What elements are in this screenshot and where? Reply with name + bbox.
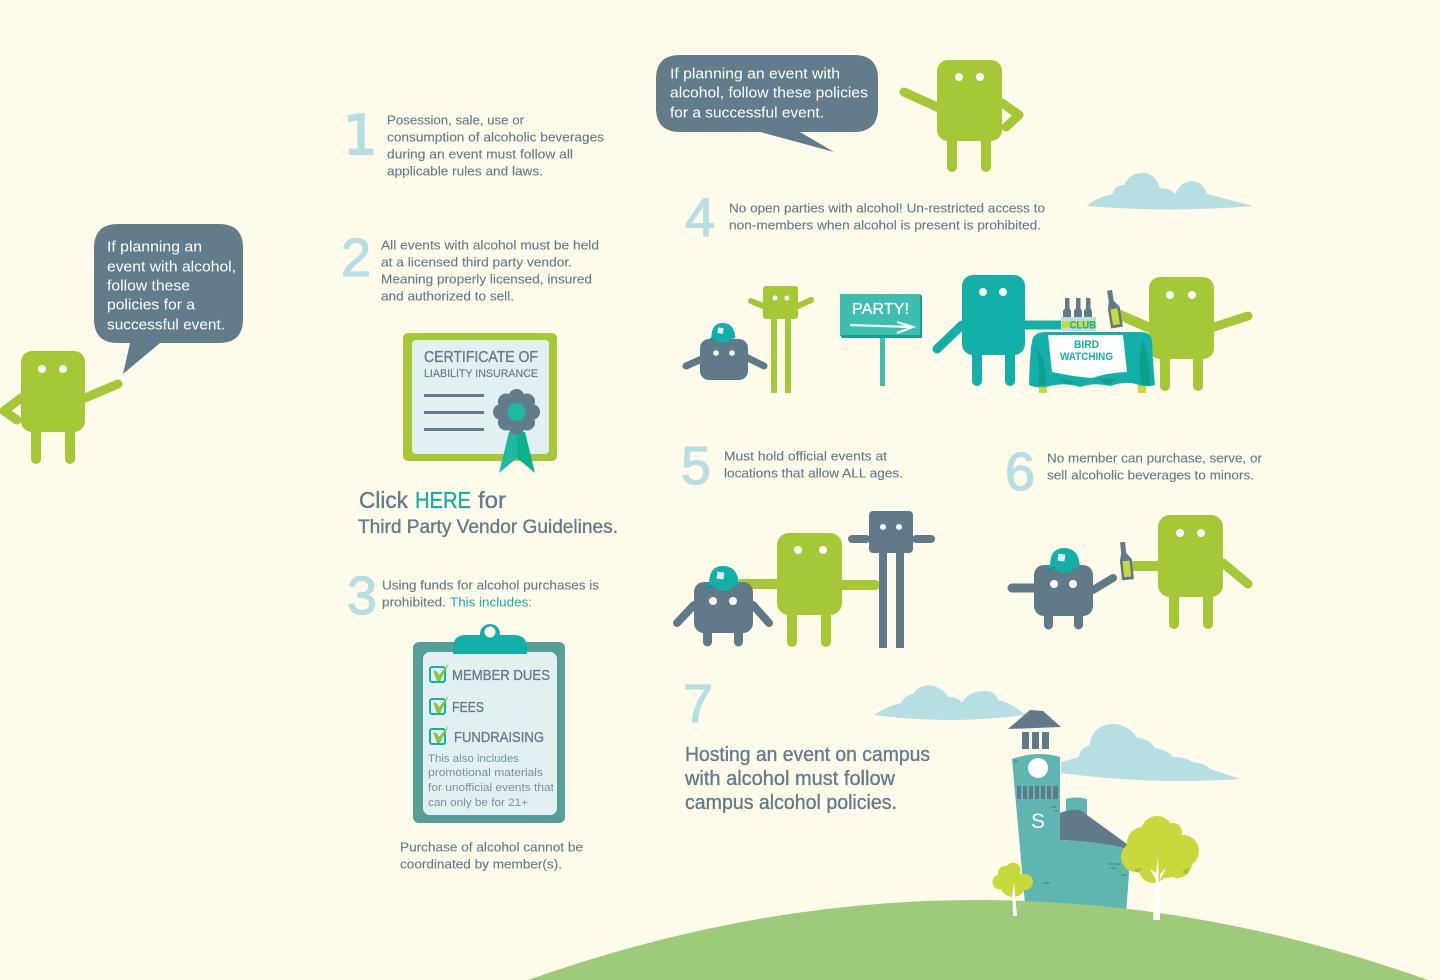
cloud behind tower xyxy=(1061,724,1240,781)
checklist items: FEES xyxy=(452,700,484,716)
tall green robot xyxy=(751,286,811,393)
speech bubble left xyxy=(94,224,243,374)
step 4 xyxy=(685,188,1045,248)
tall slate robot xyxy=(852,511,931,648)
ribbon xyxy=(499,432,535,473)
icon: liability insurance certificate xyxy=(403,333,557,473)
green robot behind table xyxy=(1105,277,1248,386)
step 1: during an event must follow all xyxy=(387,147,573,162)
step 2: at a licensed third party vendor. xyxy=(381,255,572,270)
left mascot with speech bubble xyxy=(4,224,243,459)
step 2 xyxy=(341,228,599,304)
step 7: 7 xyxy=(683,674,713,734)
step 7: with alcohol must follow xyxy=(684,768,896,790)
speech bubble top: If planning an event with xyxy=(670,66,840,83)
teal robot xyxy=(937,275,1062,381)
icon: liability insurance certificate: CERTIFICATE OF xyxy=(424,349,538,366)
small tree xyxy=(992,862,1033,916)
link heading: third party vendor guidelines: Third Party Vendor Guidelines. xyxy=(358,517,618,538)
step 4: 4 xyxy=(685,188,715,248)
step 4: No open parties with alcohol! Un-restricted access to xyxy=(729,201,1045,216)
step 3: 3 xyxy=(347,566,377,626)
green robot left xyxy=(4,351,118,459)
icon: clipboard checklist xyxy=(413,624,565,823)
speech bubble top: alcohol, follow these policies xyxy=(670,85,868,102)
step 1: Posession, sale, use or xyxy=(387,113,525,128)
tower letter: S xyxy=(1031,810,1045,833)
checklist items: MEMBER DUES xyxy=(452,668,550,684)
speech bubble left: policies for a xyxy=(107,297,196,314)
purchase note: Purchase of alcohol cannot be xyxy=(400,840,583,855)
illustration: all ages event xyxy=(677,511,931,648)
club six-pack: CLUB xyxy=(1070,320,1096,332)
step 3 xyxy=(347,566,600,626)
link heading: third party vendor guidelines: HERE xyxy=(415,487,471,513)
party sign xyxy=(840,294,922,386)
step 3: prohibited. xyxy=(382,595,446,610)
step 2: Meaning properly licensed, insured xyxy=(381,272,592,287)
tower cap xyxy=(1008,710,1061,729)
step 2: and authorized to sell. xyxy=(381,289,514,304)
step 7 xyxy=(683,674,930,814)
step 3: Using funds for alcohol purchases is xyxy=(382,578,600,593)
club six-pack xyxy=(1061,298,1096,332)
step 5 xyxy=(681,436,903,496)
step 6: sell alcoholic beverages to minors. xyxy=(1047,468,1254,483)
link heading: third party vendor guidelines xyxy=(358,487,618,538)
building body xyxy=(1012,754,1129,915)
clipboard note xyxy=(428,753,554,809)
link heading: third party vendor guidelines: Click xyxy=(359,487,408,513)
step 5: locations that allow ALL ages. xyxy=(724,466,903,481)
clipboard note: promotional materials xyxy=(428,767,544,779)
checklist items xyxy=(430,663,550,746)
link heading: third party vendor guidelines: for xyxy=(478,487,506,513)
step 5: 5 xyxy=(681,436,711,496)
step 7: Hosting an event on campus xyxy=(685,744,930,766)
step 1: 1 xyxy=(343,104,377,167)
cloud middle xyxy=(874,685,1025,720)
big tree xyxy=(1121,816,1199,920)
speech bubble left: If planning an xyxy=(107,239,202,256)
tower windows xyxy=(1022,732,1049,749)
step 1: consumption of alcoholic beverages xyxy=(387,130,605,145)
top mascot with speech bubble xyxy=(656,55,1019,167)
illustration: campus building xyxy=(1008,710,1129,915)
speech bubble left: follow these xyxy=(107,278,190,295)
step 7: campus alcohol policies. xyxy=(685,792,897,814)
step 6: No member can purchase, serve, or xyxy=(1047,451,1263,466)
bird watching table: BIRD xyxy=(1074,339,1099,351)
step 1: applicable rules and laws. xyxy=(387,164,543,179)
clipboard note: can only be for 21+ xyxy=(428,797,528,809)
step 2: All events with alcohol must be held xyxy=(381,238,599,253)
step 1 xyxy=(343,104,605,179)
step 2: 2 xyxy=(341,228,371,288)
brick marks xyxy=(1014,760,1126,884)
illustration: no serving minors xyxy=(1012,515,1248,625)
hill xyxy=(528,900,1428,980)
clock xyxy=(1028,758,1048,778)
speech bubble left: successful event. xyxy=(107,317,225,334)
step 4: non-members when alcohol is present is prohibited. xyxy=(729,218,1041,233)
illustration: open party scene xyxy=(686,275,1248,393)
bird watching table xyxy=(1029,332,1155,393)
green robot centre xyxy=(739,533,875,642)
checklist items: FUNDRAISING xyxy=(454,730,544,746)
icon: liability insurance certificate: LIABILITY INSURANCE xyxy=(424,368,538,380)
step 6 xyxy=(1005,442,1263,502)
step 3: This includes: xyxy=(450,595,532,610)
purchase note xyxy=(400,840,583,872)
roof xyxy=(1060,810,1127,849)
step 5: Must hold official events at xyxy=(724,449,887,464)
green robot xyxy=(1118,515,1248,624)
small slate robot with cap xyxy=(686,323,764,380)
purchase note: coordinated by member(s). xyxy=(400,857,562,872)
bird watching table: WATCHING xyxy=(1060,351,1113,363)
small slate robot with cap xyxy=(677,566,769,642)
small slate robot with cap xyxy=(1012,548,1113,625)
speech bubble top xyxy=(656,55,878,152)
chimney xyxy=(1066,798,1087,817)
speech bubble top: for a successful event. xyxy=(670,105,824,122)
speech bubble left: event with alcohol, xyxy=(107,259,236,276)
cloud top right xyxy=(1087,173,1253,210)
tower slats xyxy=(1017,786,1058,799)
step 6: 6 xyxy=(1005,442,1035,502)
party sign: PARTY! xyxy=(852,301,909,318)
clipboard note: This also includes xyxy=(428,753,520,765)
green robot top xyxy=(904,60,1019,167)
clipboard note: for unofficial events that xyxy=(428,782,554,794)
rosette xyxy=(493,389,540,435)
